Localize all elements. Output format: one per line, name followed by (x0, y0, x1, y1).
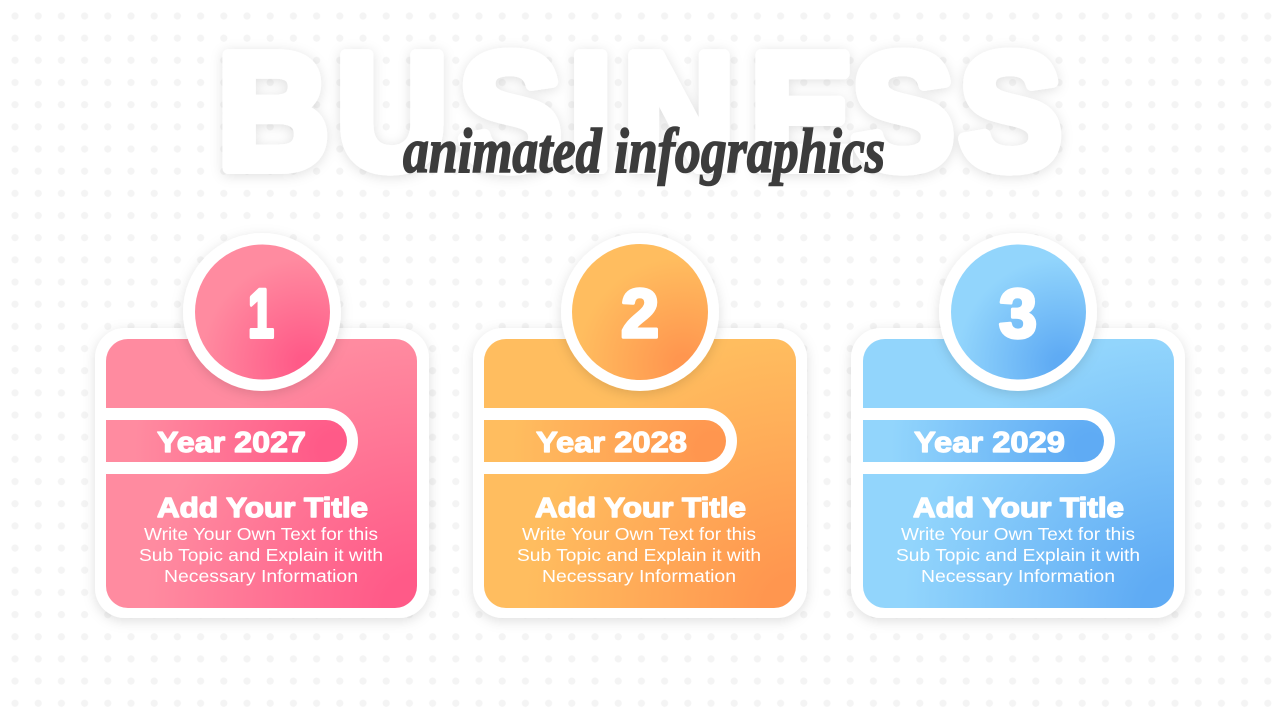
title: BUSINESS: BUSINESS (218, 19, 1062, 203)
year band 2028: Year 2028 (536, 427, 687, 459)
body text: Necessary Information (542, 566, 736, 586)
body text: Write Your Own Text for this (901, 524, 1135, 544)
number badge 3: 3 (999, 275, 1037, 352)
number badge 3 (939, 233, 1097, 391)
body text (139, 524, 383, 586)
body text: Write Your Own Text for this (144, 524, 378, 544)
body text: Sub Topic and Explain it with (896, 545, 1140, 565)
body text: Write Your Own Text for this (522, 524, 756, 544)
year band 2028 (484, 408, 737, 474)
number badge 2: 2 (621, 275, 659, 352)
body text: Sub Topic and Explain it with (517, 545, 761, 565)
subtitle: animated infographics: animated infographics (403, 115, 885, 186)
heading: Add Your Title (913, 492, 1124, 523)
panel: Year 2027 card (95, 233, 429, 618)
card fill (484, 339, 796, 608)
year band 2029: Year 2029 (914, 427, 1065, 459)
number badge 2 (561, 233, 719, 391)
number badge 1 (183, 233, 341, 391)
body text: Sub Topic and Explain it with (139, 545, 383, 565)
year band 2027 (106, 408, 358, 474)
heading: Add Your Title (157, 492, 368, 523)
number badge 1: 1 (248, 275, 274, 352)
panel: Year 2028 card (473, 233, 807, 618)
card frame (95, 328, 429, 618)
card fill (863, 339, 1174, 608)
year band 2027: Year 2027 (157, 427, 306, 459)
panel: Year 2029 card (851, 233, 1185, 618)
card frame (851, 328, 1185, 618)
heading: Add Your Title (535, 492, 746, 523)
body text: Necessary Information (921, 566, 1115, 586)
body text (896, 524, 1140, 586)
card frame (473, 328, 807, 618)
year band 2029 (863, 408, 1115, 474)
body text: Necessary Information (164, 566, 358, 586)
card fill (106, 339, 417, 608)
body text (517, 524, 761, 586)
